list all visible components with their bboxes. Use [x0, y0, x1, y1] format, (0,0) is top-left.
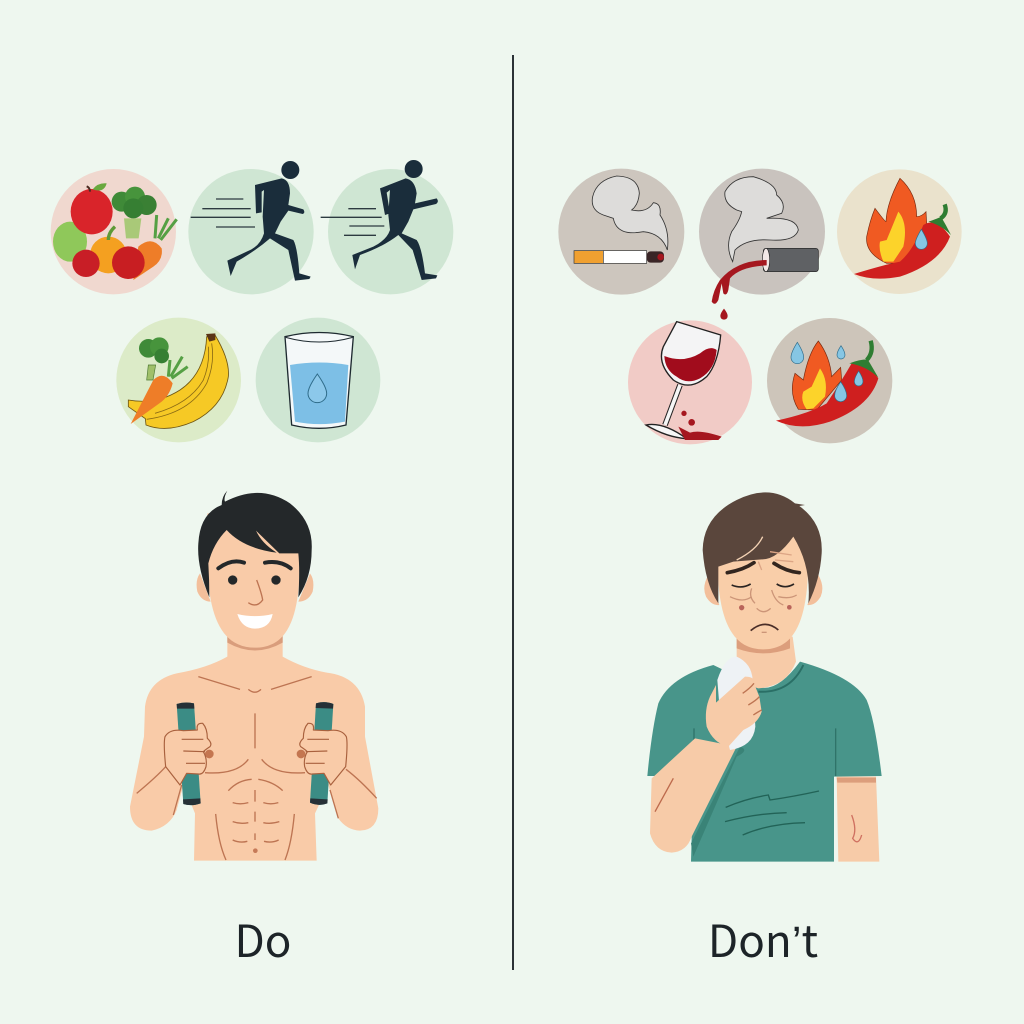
figure: fit smiling man [130, 491, 378, 861]
icon: flame and chili [837, 169, 962, 294]
tissue [717, 657, 755, 750]
panel: Do icons [51, 160, 453, 442]
neck [733, 637, 796, 688]
icon: banana and vegetables [116, 318, 241, 442]
head [197, 491, 313, 648]
body [130, 633, 378, 861]
muscle lines [137, 677, 377, 860]
icon: burnt tube with smoke and blood [699, 169, 825, 320]
icon: cigarette and smoke [558, 169, 684, 295]
figure: unwell man [647, 492, 882, 862]
icon: spilled wine glass [628, 320, 752, 444]
label: Don't: Don’t [708, 906, 818, 970]
icon: runner two [321, 160, 453, 294]
hand grips [164, 702, 347, 805]
head [703, 492, 822, 649]
hand [706, 677, 762, 747]
shirt [647, 662, 882, 862]
icon: glass of water [256, 318, 380, 442]
icon: flame, chili and sweat drops [767, 318, 892, 443]
icon: runner one [188, 161, 314, 294]
left arm [650, 738, 737, 853]
label: Do: Do [235, 906, 291, 970]
panel: Don't icons [558, 169, 962, 444]
icon: fruits and vegetables [51, 169, 177, 294]
right arm [837, 777, 879, 862]
